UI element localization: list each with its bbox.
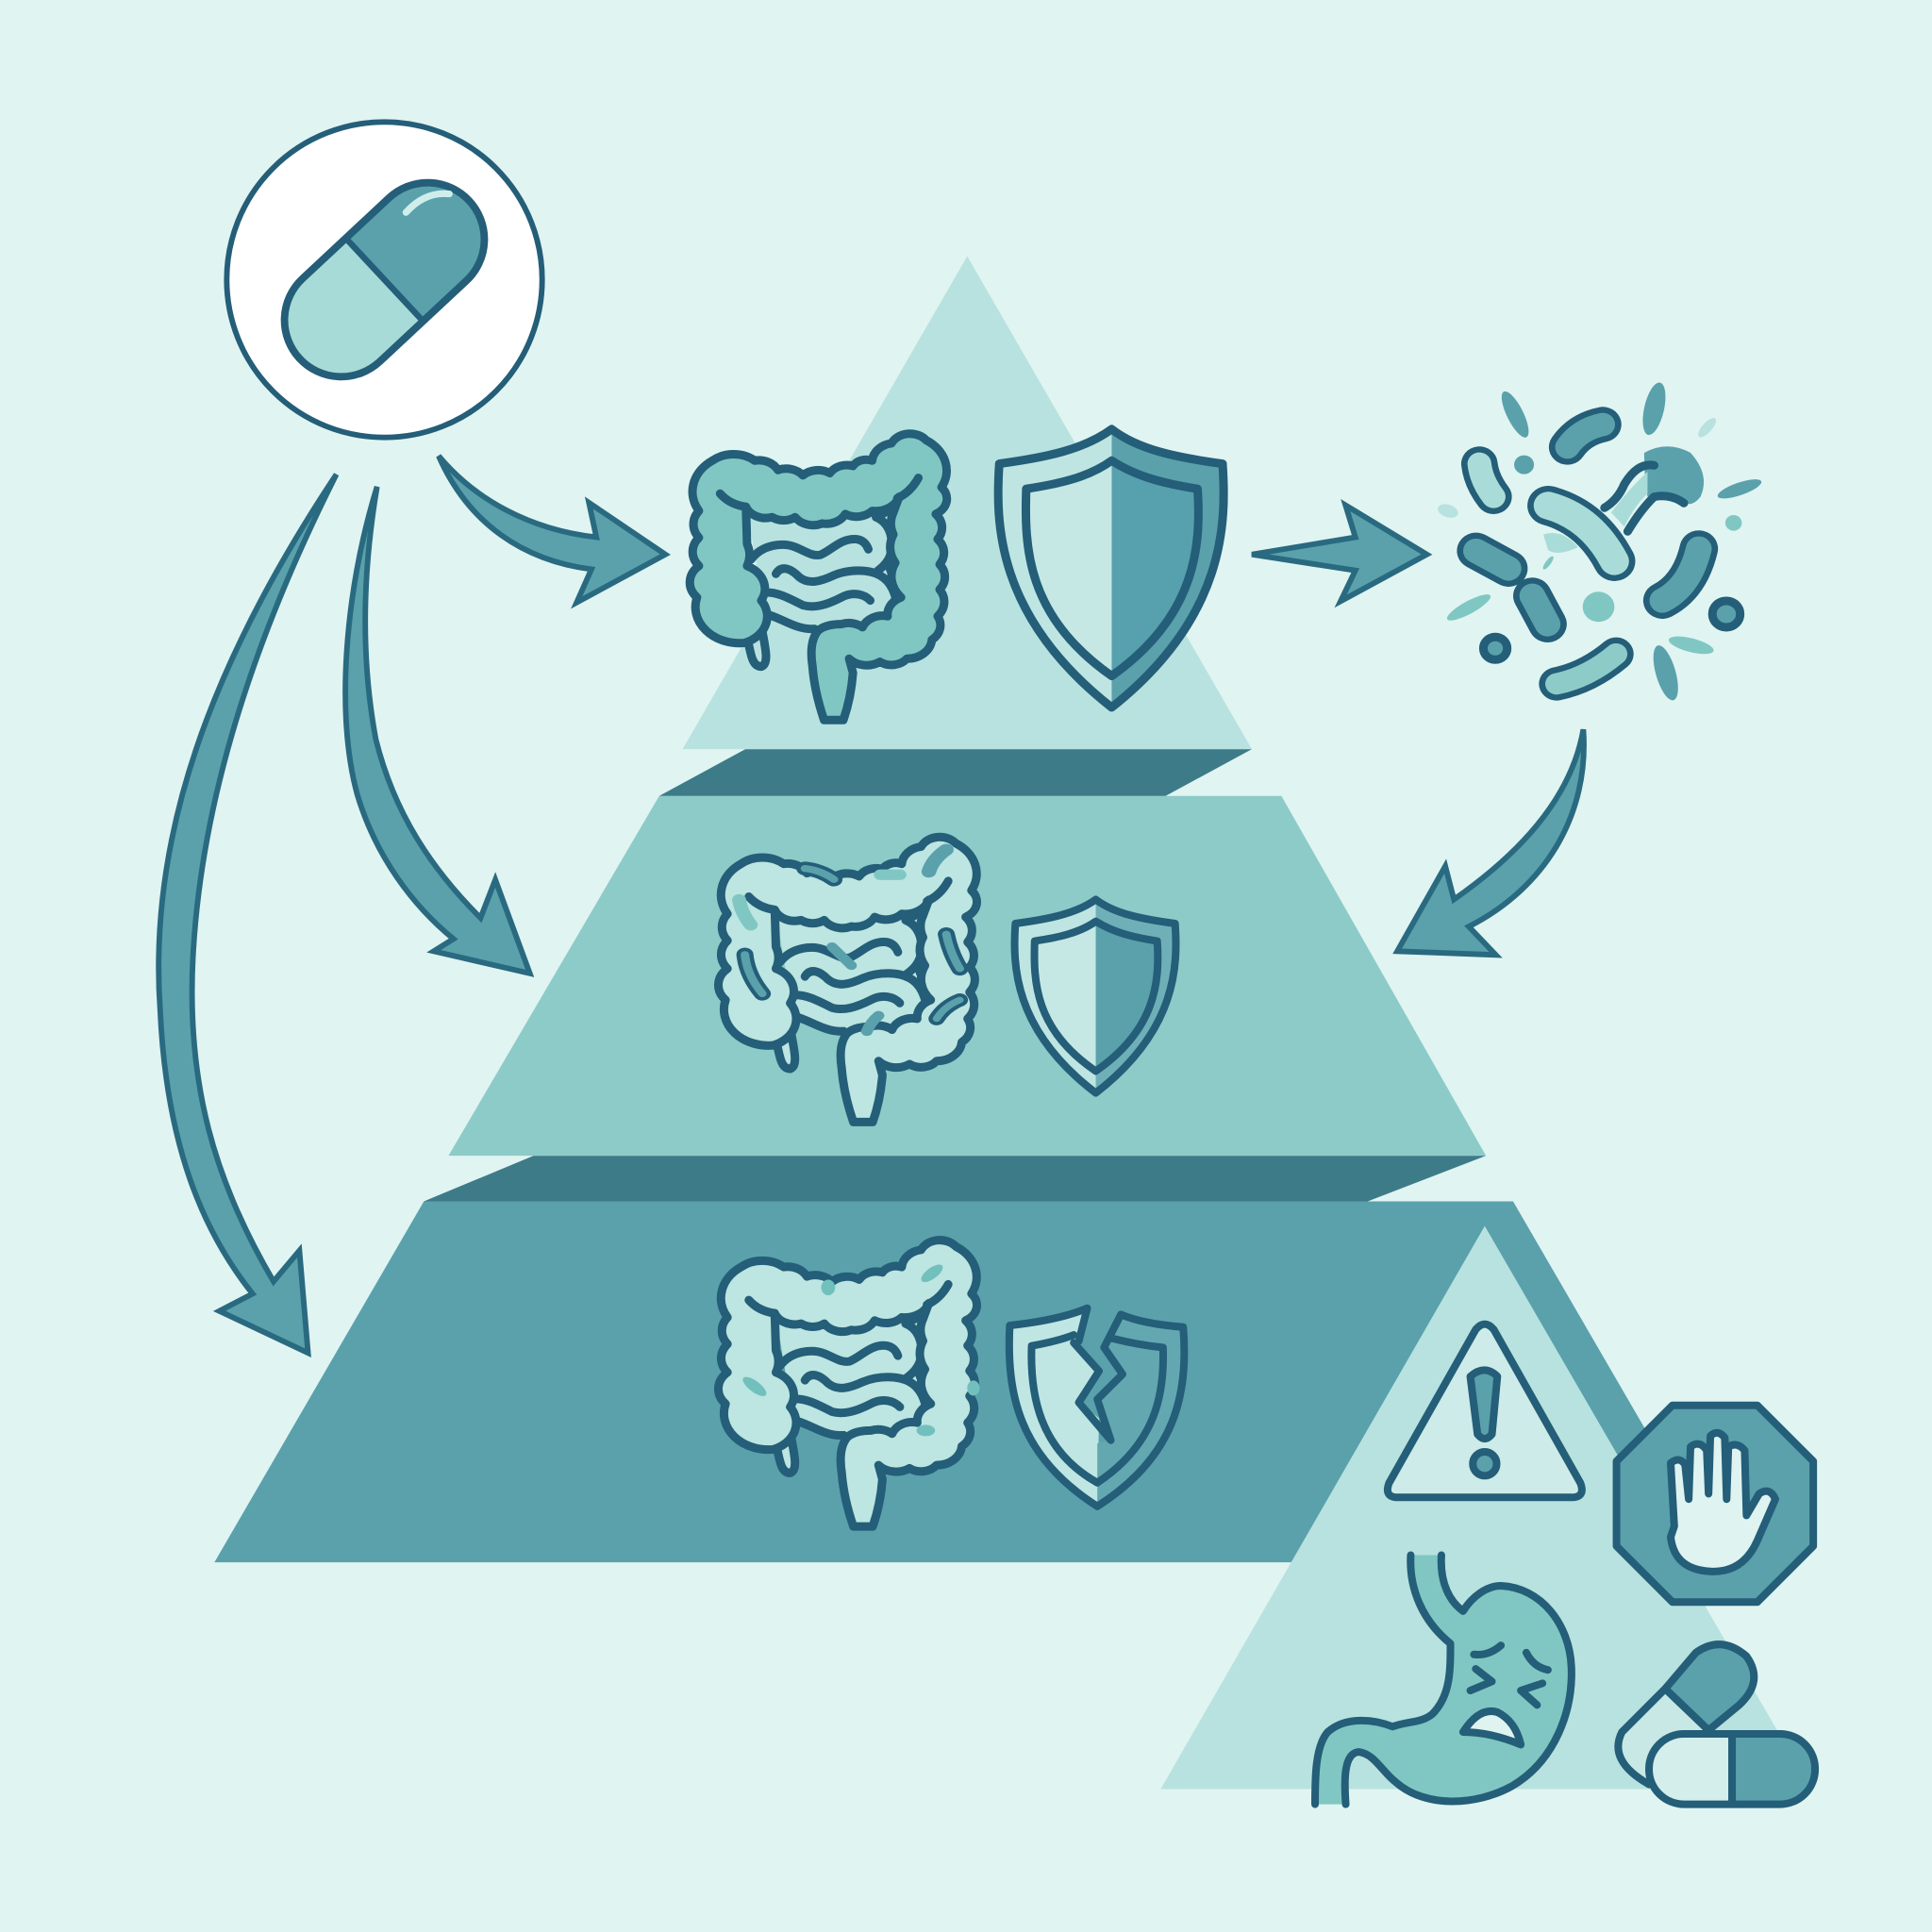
icon: upset stomach — [1315, 1556, 1572, 1805]
side effects cluster — [1315, 1324, 1815, 1805]
arrow: bacteria to middle tier — [1397, 729, 1584, 955]
pyramid level 3: base tier — [214, 1201, 1723, 1562]
icon: thinner shield, middle tier — [1015, 900, 1175, 1093]
capsule — [261, 159, 508, 400]
gut bacteria spots — [739, 850, 959, 1031]
spray leaves — [1436, 380, 1763, 703]
pyramid level 2: middle tier — [448, 796, 1486, 1156]
arrow: capsule to middle tier — [345, 487, 530, 974]
white circle — [226, 122, 542, 438]
icon: healthy intestine, top tier — [690, 434, 947, 720]
pyramid level 1: top tier — [683, 257, 1252, 749]
icon: scattered bacteria — [1436, 380, 1763, 703]
icon: intestine with bacteria, middle tier — [718, 837, 977, 1122]
gut spots — [740, 1262, 979, 1436]
warning triangle backdrop — [1160, 1226, 1811, 1789]
arrow: capsule to top tier — [439, 456, 665, 603]
icon: intestine, base tier — [718, 1241, 979, 1526]
pyramid shadow band lower — [424, 1156, 1486, 1201]
burst cell — [1543, 446, 1704, 553]
icon: two capsules — [1618, 1644, 1815, 1805]
pyramid shadow band upper — [659, 749, 1252, 796]
rod bacteria — [1476, 425, 1699, 684]
arrow: shield to bacteria — [1252, 506, 1426, 601]
dots — [1483, 456, 1741, 659]
arrow: capsule to base tier — [158, 475, 337, 1353]
capsule icon in white circle — [226, 122, 542, 438]
pyramid — [214, 257, 1723, 1562]
icon: stop hand octagon — [1617, 1406, 1813, 1602]
icon: cracked shield, base tier — [1009, 1308, 1184, 1507]
icon: strong shield, top tier — [998, 429, 1224, 708]
icon: warning triangle — [1388, 1324, 1582, 1497]
